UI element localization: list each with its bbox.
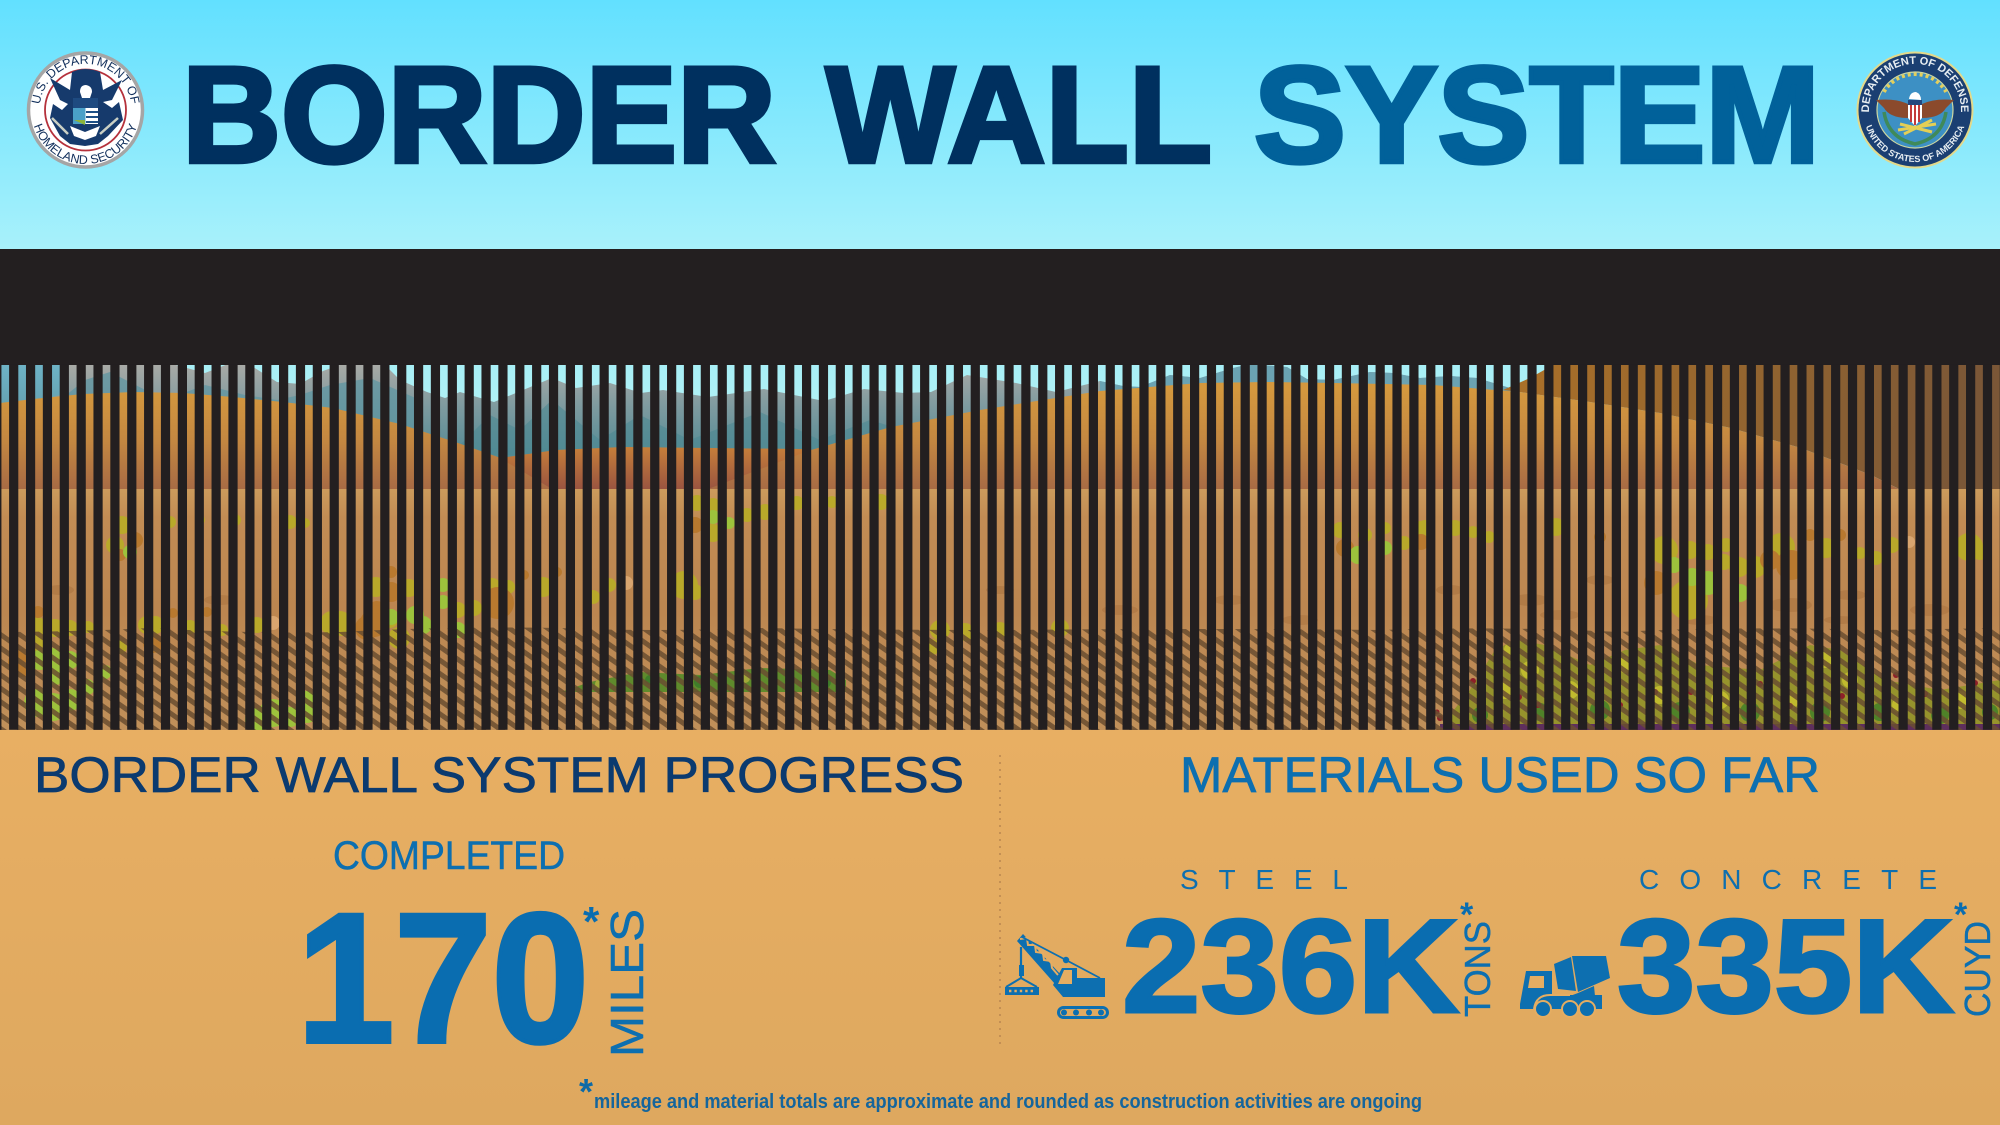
title: SYSTEM xyxy=(1254,39,1820,192)
icon: Department of Defense seal: DEPARTMENT OF DEFENSE xyxy=(1861,56,1969,112)
label: completed: COMPLETED xyxy=(333,834,565,878)
footnote: mileage and material totals are approximate and rounded as construction activities are ongoing xyxy=(594,1091,1422,1113)
ground speckle xyxy=(46,575,1950,625)
big number: 236K: 236K xyxy=(1122,893,1459,1041)
bottom panel background xyxy=(0,730,2000,1125)
foreground brown hill xyxy=(1503,365,2000,489)
middle red dune xyxy=(507,447,870,489)
shrubs: yellow xyxy=(29,496,1986,653)
title: WALL xyxy=(826,39,1212,192)
low green vegetation band xyxy=(561,668,846,692)
distant mountains xyxy=(0,362,1510,470)
asterisk: concrete: * xyxy=(1954,896,1968,934)
sandy ground xyxy=(0,489,2000,730)
title xyxy=(182,39,1820,192)
desert scene behind the wall xyxy=(0,362,2000,730)
footnote: * xyxy=(579,1071,593,1112)
unit: miles: MILES xyxy=(601,909,653,1057)
wall top band xyxy=(0,249,2000,365)
unit: tons: TONS xyxy=(1457,921,1498,1017)
right dune xyxy=(708,382,1899,489)
asterisk: steel: * xyxy=(1460,896,1474,934)
label: concrete: CONCRETE xyxy=(1639,864,1937,895)
icon: crane xyxy=(1005,934,1108,1018)
diagonal wall shadow xyxy=(0,628,2000,730)
big number: 170: 170 xyxy=(297,876,589,1082)
footnote xyxy=(579,1071,1422,1113)
icon: cement mixer truck xyxy=(1520,956,1610,1018)
panel: materials xyxy=(1005,747,1998,1041)
shrubs: pale xyxy=(266,536,1915,630)
icon: Department of Defense seal: UNITED STATES OF AMERICA xyxy=(1866,124,1964,162)
shrubs: lime xyxy=(26,512,1747,730)
unit: cubic yards: CUYD xyxy=(1957,921,1998,1017)
title: BORDER xyxy=(182,39,776,192)
heading: materials: MATERIALS USED SO FAR xyxy=(1180,747,1820,803)
header background xyxy=(0,0,2000,249)
left dune xyxy=(0,392,552,489)
shrubs: orange xyxy=(10,519,1844,675)
icon: Department of Defense seal xyxy=(1856,52,1974,168)
asterisk: 170: * xyxy=(583,898,600,945)
wall bollard bars xyxy=(0,365,2000,730)
label: steel: STEEL xyxy=(1180,864,1348,895)
icon: Department of Homeland Security seal xyxy=(26,51,144,169)
sky xyxy=(0,365,2000,490)
big number: 335K: 335K xyxy=(1617,893,1954,1041)
divider xyxy=(999,755,1001,1048)
icon: Department of Homeland Security seal: U.S. DEPARTMENT OF xyxy=(31,55,140,104)
heading: progress: BORDER WALL SYSTEM PROGRESS xyxy=(34,747,964,803)
panel: progress xyxy=(34,747,964,1082)
right foreground vegetation xyxy=(1434,640,2000,730)
icon: Department of Homeland Security seal: HOMELAND SECURITY xyxy=(34,123,136,164)
